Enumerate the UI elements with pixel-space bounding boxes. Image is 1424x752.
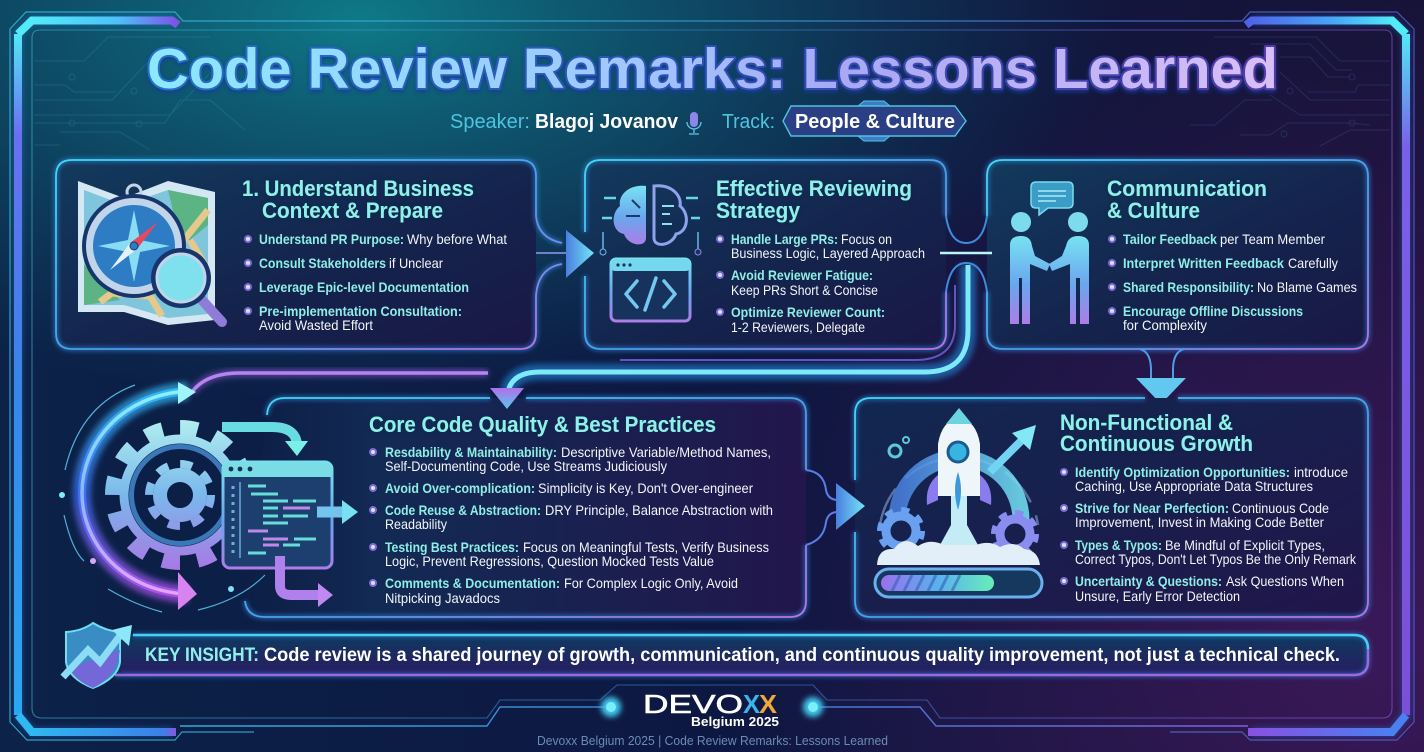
bullet list — [717, 231, 925, 335]
bullet list: Handle Large PRs: — [731, 231, 838, 247]
bullet list: For Complex Logic Only, Avoid — [564, 575, 738, 591]
bullet list — [370, 444, 773, 606]
bullet list: Understand PR Purpose: — [259, 231, 404, 247]
bullet list: Avoid Reviewer Fatigue: — [731, 267, 873, 283]
bullet list: Resdability & Maintainability: — [385, 444, 557, 460]
panel: non-functional and continuous growth — [855, 398, 1368, 617]
speaker and track line: Speaker: — [450, 111, 530, 133]
bullet list: Improvement, Invest in Making Code Better — [1075, 514, 1324, 530]
bullet list: Caching, Use Appropriate Data Structures — [1075, 478, 1313, 494]
logo: Devoxx Belgium 2025 — [643, 689, 779, 729]
bullet list: if Unclear — [389, 255, 443, 271]
panel: effective reviewing strategy — [585, 160, 946, 349]
panel: communication and culture — [987, 160, 1368, 349]
callout: key insight: KEY INSIGHT: — [145, 645, 259, 666]
bullet list: Continuous Code — [1232, 500, 1329, 516]
bullet list: Avoid Wasted Effort — [259, 317, 373, 333]
bullet list: Optimize Reviewer Count: — [731, 304, 885, 320]
bullet list: Comments & Documentation: — [385, 575, 560, 591]
icon: microphone — [687, 112, 701, 134]
bullet list: Uncertainty & Questions: — [1075, 573, 1222, 589]
speaker and track line — [450, 101, 966, 141]
bullet list: Correct Typos, Don't Let Typos Be the Only Remark — [1075, 551, 1357, 567]
callout: key insight — [115, 635, 1368, 675]
bullet list: Leverage Epic-level Documentation — [259, 279, 469, 295]
bullet list: Code Reuse & Abstraction: — [385, 502, 541, 518]
bullet list: Types & Typos: — [1075, 537, 1162, 553]
bullet list: per Team Member — [1220, 231, 1325, 247]
connector: glowing flow from strategy panel to quality panel — [192, 265, 968, 392]
bullet list: Nitpicking Javadocs — [385, 590, 500, 606]
bullet list: Descriptive Variable/Method Names, — [561, 444, 771, 460]
icon: code window with arrows — [222, 427, 358, 607]
bullet list: Why before What — [407, 231, 507, 247]
icon: gears — [112, 428, 248, 562]
bullet list: Tailor Feedback — [1123, 231, 1217, 247]
heading: Continuous Growth — [1060, 431, 1253, 456]
heading: 1. Understand Business — [242, 176, 474, 201]
bullet list: 1-2 Reviewers, Delegate — [731, 319, 865, 335]
speaker and track line: Blagoj Jovanov — [535, 111, 679, 133]
panel: understand business context — [56, 160, 562, 349]
heading: Core Code Quality & Best Practices — [369, 412, 716, 437]
speaker and track line: Track: — [722, 111, 775, 133]
heading — [1107, 176, 1267, 223]
icon: shield with growth arrow — [63, 623, 132, 688]
bullet list: introduce — [1294, 464, 1348, 480]
bullet list: Focus on — [841, 231, 892, 247]
logo: Devoxx Belgium 2025: Belgium 2025 — [691, 715, 779, 729]
bullet list: Identify Optimization Opportunities: — [1075, 464, 1290, 480]
bullet list: Unsure, Early Error Detection — [1075, 588, 1240, 604]
heading: Communication — [1107, 176, 1267, 201]
bullet list: Logic, Prevent Regressions, Question Mocked Tests Value — [385, 553, 714, 569]
heading: Effective Reviewing — [716, 176, 912, 201]
bullet list: Carefully — [1288, 255, 1338, 271]
track badge: People & Culture — [795, 111, 955, 133]
heading — [1060, 410, 1253, 456]
heading: & Culture — [1107, 198, 1200, 223]
heading: Non-Functional & — [1060, 410, 1233, 435]
bullet list: Pre-implementation Consultation: — [259, 303, 462, 319]
bullet list: Interpret Written Feedback — [1123, 255, 1284, 271]
bullet list — [1061, 464, 1357, 604]
heading — [716, 176, 912, 223]
arrow: context to strategy — [532, 249, 572, 257]
bullet list — [1109, 231, 1357, 333]
bullet list: Avoid Over-complication: — [385, 480, 535, 496]
logo: Devoxx Belgium 2025: X — [743, 689, 761, 719]
bullet list: Consult Stakeholders — [259, 255, 386, 271]
connector: communication to non-functional — [1136, 349, 1186, 404]
bullet list: Focus on Meaningful Tests, Verify Business — [523, 539, 769, 555]
icon: two people with speech bubble — [1010, 182, 1089, 324]
bullet list: Be Mindful of Explicit Types, — [1165, 537, 1325, 553]
bullet list: Encourage Offline Discussions — [1123, 303, 1303, 319]
callout: key insight: Code review is a shared journey of growth, communication, and continuous quality improvement, not just a technical check. — [264, 645, 1340, 666]
footer caption: Devoxx Belgium 2025 | Code Review Remarks: Lessons Learned — [537, 734, 888, 748]
bullet list: Keep PRs Short & Concise — [731, 282, 878, 298]
bullet list: Shared Responsibility: — [1123, 279, 1254, 295]
bullet list: DRY Principle, Balance Abstraction with — [545, 502, 773, 518]
bullet list: Readability — [385, 516, 447, 532]
icon: looping arc arrows — [59, 382, 265, 612]
logo: Devoxx Belgium 2025: X — [759, 689, 778, 719]
bullet list — [245, 231, 507, 333]
arrowhead: into non-functional panel — [836, 483, 865, 530]
icon: brain and code window — [600, 186, 701, 321]
bullet list: Strive for Near Perfection: — [1075, 500, 1229, 516]
connector: quality to non-functional — [806, 470, 846, 545]
bullet list: Testing Best Practices: — [385, 539, 519, 555]
bullet list: No Blame Games — [1257, 279, 1357, 295]
bullet list: for Complexity — [1123, 317, 1207, 333]
bullet list: Ask Questions When — [1226, 573, 1344, 589]
panel: core code quality — [59, 382, 806, 617]
icon: map, compass and magnifier — [78, 181, 222, 325]
track badge — [783, 101, 966, 141]
heading: Strategy — [716, 198, 801, 223]
heading: Context & Prepare — [262, 198, 443, 223]
arrow: flow into quality panel — [490, 388, 524, 409]
connector: link between strategy and communication — [936, 216, 998, 292]
logo: Devoxx Belgium 2025: DEVO — [643, 689, 743, 719]
heading — [242, 176, 474, 223]
bullet list: Self-Documenting Code, Use Streams Judiciously — [385, 458, 667, 474]
bullet list: Simplicity is Key, Don't Over-engineer — [538, 480, 753, 496]
arrowhead: into strategy panel — [566, 230, 594, 278]
icon: rocket launch — [875, 408, 1042, 597]
bullet list: Business Logic, Layered Approach — [731, 245, 925, 261]
title: Code Review Remarks: Lessons Learned — [147, 37, 1278, 101]
